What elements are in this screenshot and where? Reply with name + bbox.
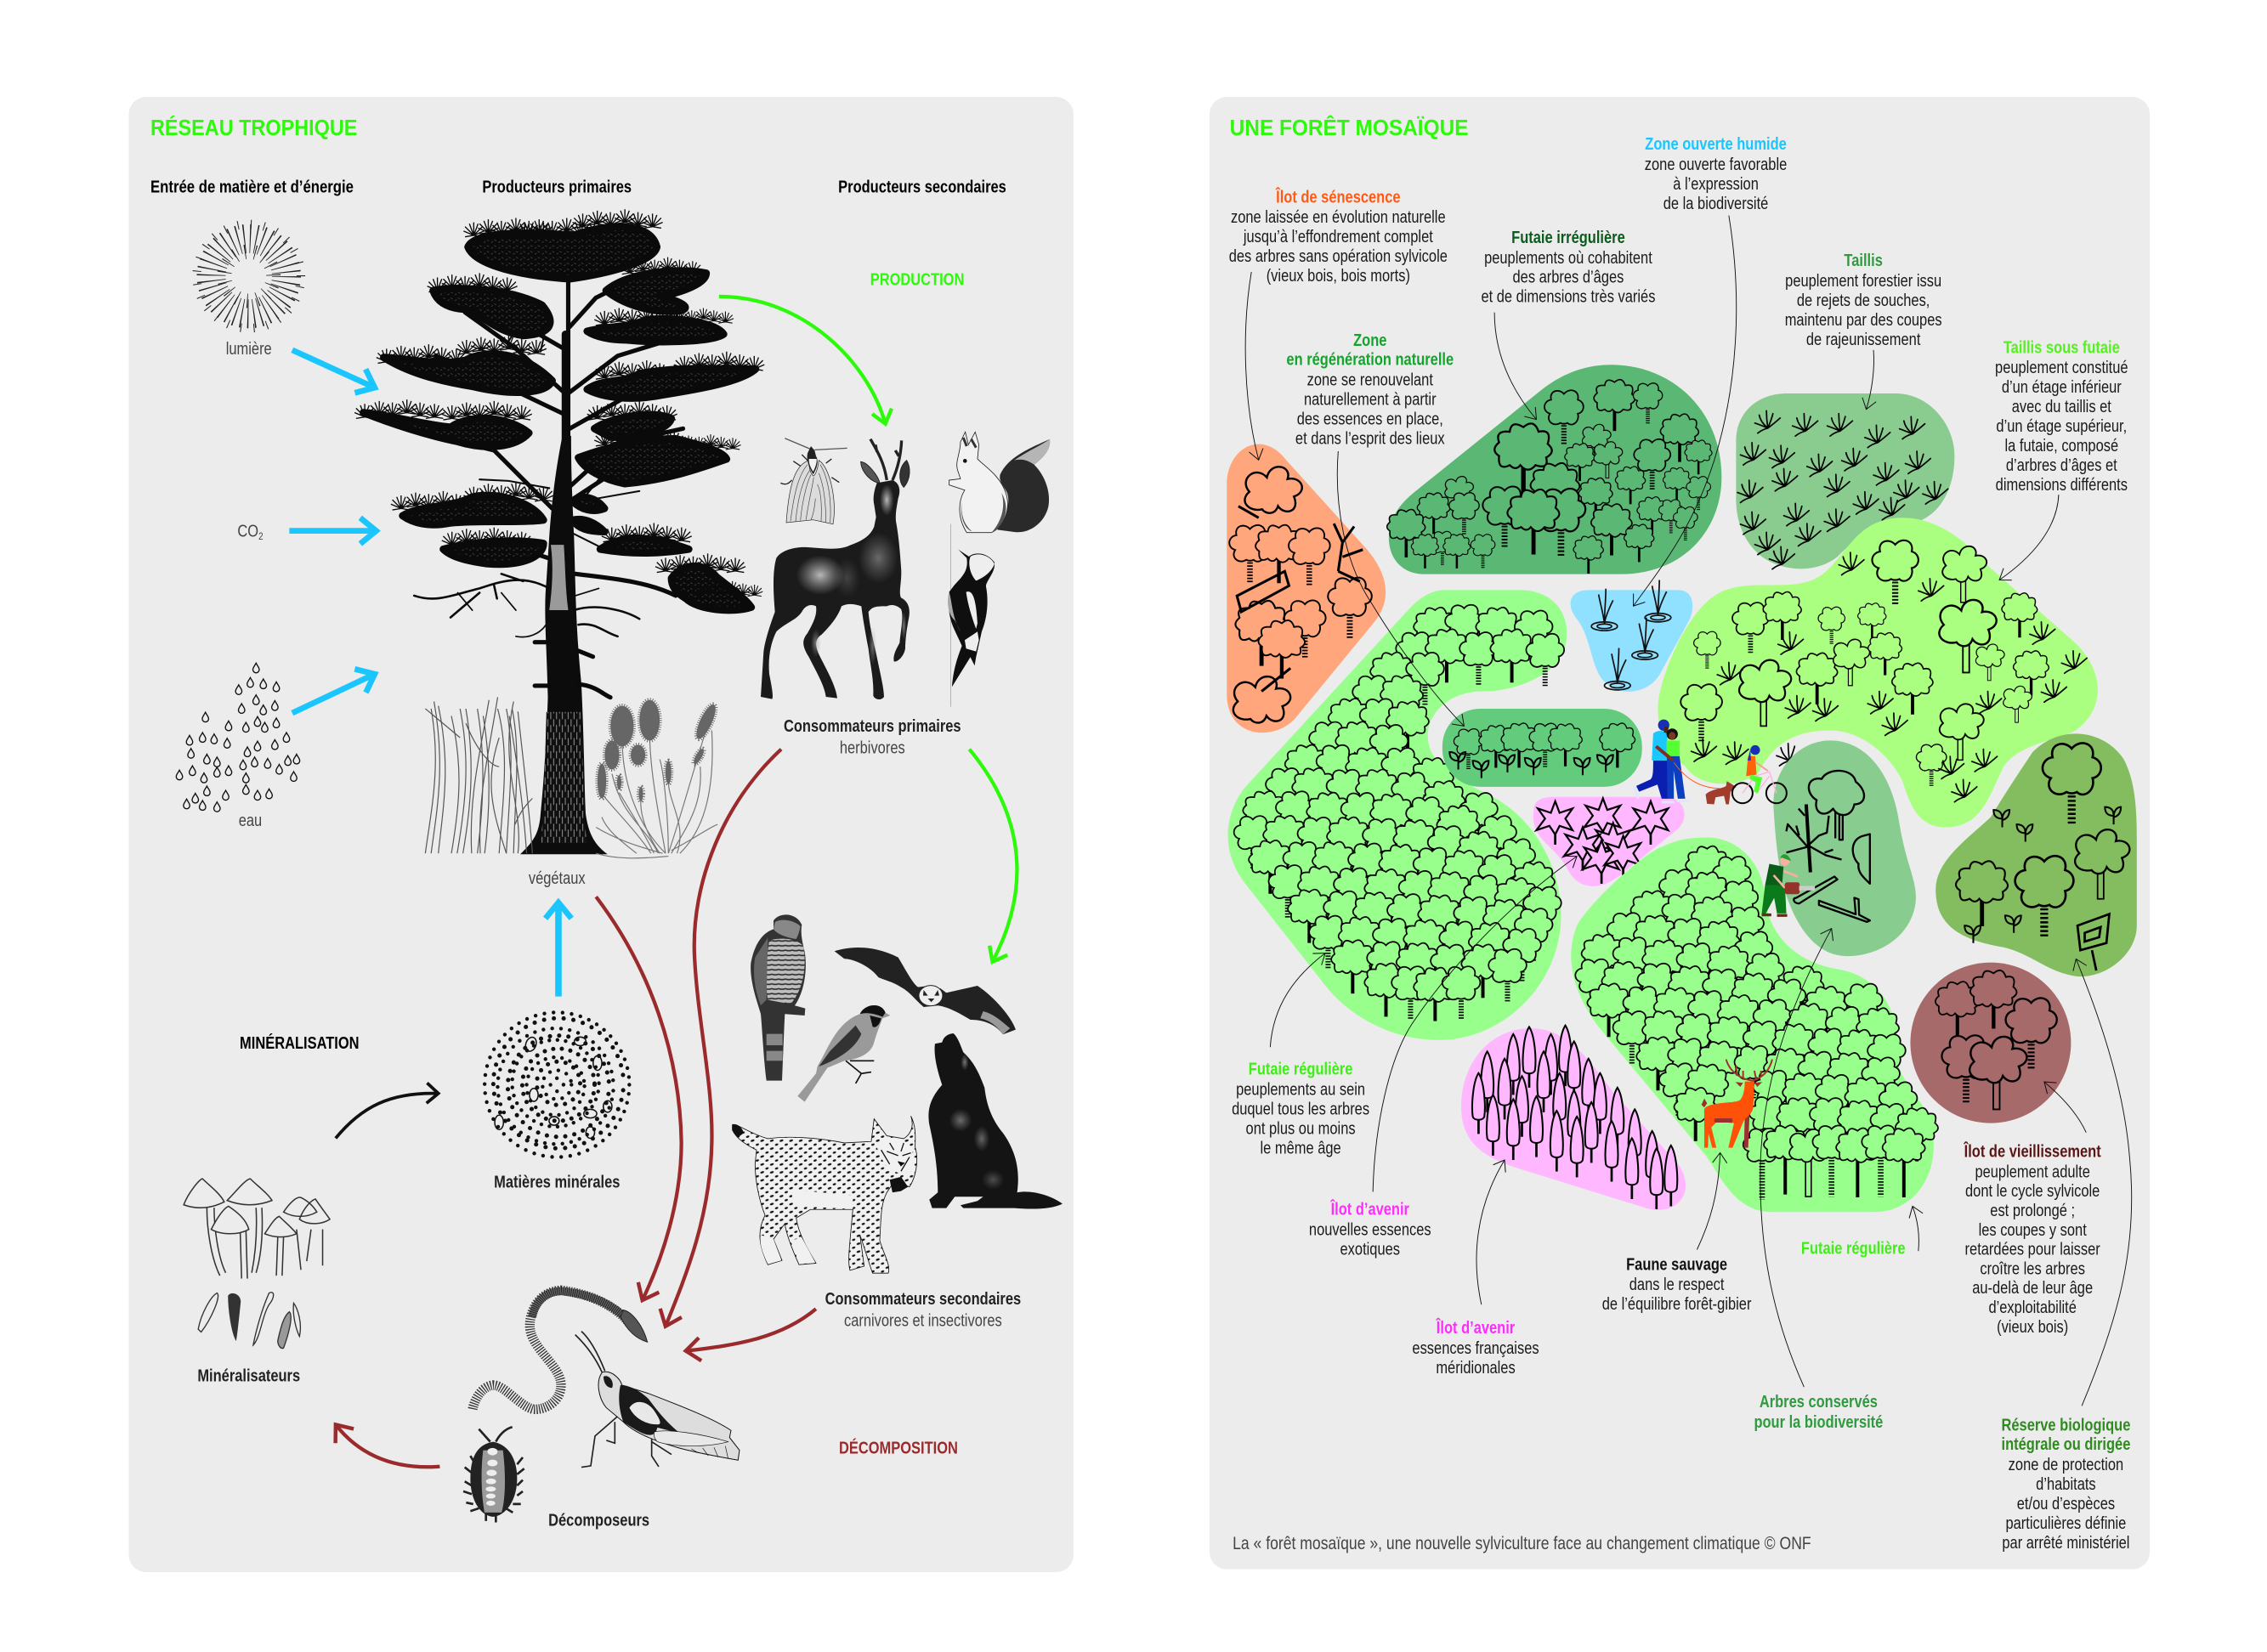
illustration: bat bbox=[835, 948, 1016, 1034]
callout: îlot de vieillissement: au-delà de leur âge bbox=[1972, 1278, 2093, 1298]
callout: zone en régénération: Zone bbox=[1353, 330, 1386, 349]
label: décomposeurs: Décomposeurs bbox=[548, 1510, 649, 1530]
illustration: moth bbox=[780, 438, 847, 524]
figure: lumberjack bbox=[1762, 854, 1815, 915]
figure: walking couple bbox=[1635, 720, 1689, 802]
callout: îlot de sénescence: (vieux bois, bois morts) bbox=[1267, 265, 1410, 285]
callout: zone en régénération: et dans l’esprit des lieux bbox=[1295, 428, 1445, 448]
callout: futaie régulière gauche: peuplements au sein bbox=[1236, 1079, 1365, 1099]
callout: zone ouverte humide: à l’expression bbox=[1673, 173, 1759, 193]
zone: îlot d'avenir français bbox=[1461, 1026, 1686, 1210]
callout: réserve biologique: zone de protection bbox=[2009, 1454, 2123, 1474]
callout: zone en régénération: naturellement à partir bbox=[1304, 389, 1437, 409]
callout: faune sauvage: Faune sauvage bbox=[1626, 1254, 1727, 1274]
callout: taillis sous futaie: dimensions différents bbox=[1996, 474, 2128, 494]
illustration: wolf bbox=[928, 1033, 1063, 1208]
arrow: CO2 to tree bbox=[289, 529, 377, 533]
arrow: plants to decomposers bbox=[596, 897, 682, 1300]
callout: îlot de vieillissement: est prolongé ; bbox=[1990, 1200, 2075, 1219]
zone: futaie régulière gauche bbox=[1228, 590, 1567, 1040]
arrow: water to tree bbox=[292, 674, 375, 713]
callout: îlot d'avenir exotiques: nouvelles essences bbox=[1309, 1219, 1431, 1239]
callout: taillis sous futaie: Taillis sous futaie bbox=[2003, 337, 2120, 357]
illustration: lynx bbox=[732, 1116, 917, 1273]
figure: dog and leash bbox=[1674, 762, 1737, 805]
callout: îlot de sénescence: zone laissée en évolution naturelle bbox=[1231, 207, 1446, 226]
callout: îlot de vieillissement: d’exploitabilité bbox=[1988, 1297, 2077, 1316]
callout: réserve biologique: Réserve biologique bbox=[2001, 1415, 2130, 1434]
figures: walkers and cyclist bbox=[1635, 720, 1815, 915]
icon: water drops bbox=[176, 663, 300, 812]
arrow: minerals to plants bbox=[557, 902, 560, 997]
label: eau: eau bbox=[239, 810, 262, 829]
heading: entrée de matière: Entrée de matière et d’énergie bbox=[150, 177, 354, 196]
callout: réserve biologique: et/ou d’espèces bbox=[2017, 1493, 2115, 1513]
illustration: woodlouse bbox=[463, 1427, 524, 1523]
arrow: carnivores to decomposers bbox=[686, 1309, 816, 1351]
callout: îlot de vieillissement: (vieux bois) bbox=[1997, 1316, 2068, 1336]
callout: futaie régulière gauche: le même âge bbox=[1260, 1138, 1341, 1157]
callout: taillis: Taillis bbox=[1844, 251, 1883, 270]
callout: futaie régulière droite: Futaie régulière bbox=[1801, 1238, 1906, 1258]
callout: arbres conservés: pour la biodiversité bbox=[1754, 1412, 1883, 1431]
callout: zone ouverte humide: zone ouverte favorable bbox=[1645, 154, 1787, 173]
panel: une forêt mosaïque bbox=[1210, 97, 2150, 1570]
illustrations: primary consumers bbox=[761, 432, 1050, 707]
arrow: light to tree bbox=[292, 350, 375, 388]
label: production: PRODUCTION bbox=[870, 269, 964, 289]
callout: futaie régulière gauche: duquel tous les arbres bbox=[1232, 1099, 1369, 1118]
callout: futaie irrégulière: des arbres d’âges bbox=[1513, 267, 1624, 286]
zone: coupe bbox=[1773, 740, 1916, 956]
callout: futaie irrégulière: peuplements où cohabitent bbox=[1484, 247, 1652, 267]
callout: îlot de vieillissement: peuplement adulte bbox=[1975, 1162, 2090, 1181]
heading: producteurs primaires: Producteurs primaires bbox=[482, 177, 632, 196]
icon: sun bbox=[196, 224, 301, 328]
illustration: grass stems bbox=[425, 697, 532, 853]
callout: taillis sous futaie: la futaie, composé bbox=[2005, 435, 2118, 455]
zone: réserve biologique bbox=[1935, 733, 2137, 976]
callout: zone en régénération: en régénération naturelle bbox=[1286, 349, 1454, 369]
callout: futaie irrégulière: Futaie irrégulière bbox=[1511, 227, 1625, 246]
callout: arbres conservés: Arbres conservés bbox=[1760, 1391, 1878, 1411]
callout: îlot de sénescence: des arbres sans opération sylvicole bbox=[1229, 246, 1448, 265]
label: décomposition: DÉCOMPOSITION bbox=[839, 1438, 958, 1457]
zone: futaie régulière droite bbox=[1571, 837, 1938, 1212]
zone: taillis sous futaie bbox=[1658, 518, 2098, 828]
label: CO2: 2 bbox=[258, 531, 264, 542]
illustration: grasshopper bbox=[575, 1332, 740, 1468]
label: minéralisateurs: Minéralisateurs bbox=[197, 1366, 300, 1385]
callout: futaie irrégulière: et de dimensions très variés bbox=[1481, 286, 1655, 306]
zone: îlot d'avenir exotique bbox=[1533, 797, 1685, 886]
zone: îlot de vieillissement bbox=[1910, 963, 2071, 1123]
callout: îlot d'avenir exotiques: exotiques bbox=[1340, 1239, 1400, 1259]
callout: taillis sous futaie: d’un étage supérieur, bbox=[1996, 416, 2127, 435]
callout: îlot de vieillissement: dont le cycle sylvicole bbox=[1965, 1181, 2100, 1201]
caption: crédit: La « forêt mosaïque », une nouvelle sylviculture face au changement climatique © ONF bbox=[1233, 1533, 1811, 1553]
callout: futaie régulière gauche: ont plus ou moins bbox=[1246, 1118, 1356, 1138]
title: une forêt mosaïque: UNE FORÊT MOSAÏQUE bbox=[1230, 115, 1469, 140]
illustrations: secondary consumers bbox=[732, 914, 1063, 1273]
arrow: decomposers to mineralizers bbox=[336, 1424, 439, 1467]
zone: taillis bbox=[1736, 393, 1954, 569]
panel: réseau trophique bbox=[128, 97, 1074, 1572]
callout: îlot d'avenir françaises: essences françaises bbox=[1412, 1338, 1539, 1357]
label: consommateurs secondaires: carnivores et insectivores bbox=[844, 1310, 1002, 1330]
callout: zone ouverte humide: de la biodiversité bbox=[1663, 193, 1768, 212]
label: CO2: CO bbox=[237, 521, 258, 540]
callout: réserve biologique: particulières définie bbox=[2005, 1513, 2126, 1532]
heading: producteurs secondaires: Producteurs secondaires bbox=[838, 177, 1006, 196]
callout: taillis: de rajeunissement bbox=[1806, 329, 1920, 348]
illustration: bacteria bbox=[198, 1293, 300, 1349]
callout: zone en régénération: zone se renouvelant bbox=[1307, 370, 1433, 389]
label: végétaux: végétaux bbox=[529, 868, 586, 887]
callout: îlot de vieillissement: croître les arbres bbox=[1980, 1259, 2085, 1278]
callout: taillis: de rejets de souches, bbox=[1797, 290, 1930, 309]
illustration: roe deer bbox=[761, 439, 910, 699]
callout: îlot d'avenir exotiques: Îlot d’avenir bbox=[1330, 1199, 1409, 1219]
callout: réserve biologique: par arrêté ministériel bbox=[2002, 1532, 2129, 1552]
illustration: hawk bbox=[751, 914, 806, 1081]
callout: futaie régulière gauche: Futaie régulière bbox=[1249, 1059, 1352, 1078]
title: réseau trophique: RÉSEAU TROPHIQUE bbox=[150, 116, 357, 140]
callout: îlot de sénescence: Îlot de sénescence bbox=[1275, 187, 1401, 206]
arrow: herbivores to carnivores bbox=[969, 750, 1017, 962]
arrow: mineralisation bbox=[336, 1094, 439, 1138]
label: lumière: lumière bbox=[226, 338, 272, 358]
arrow: herbivores to decomposers bbox=[666, 750, 781, 1327]
zone: régénération naturelle bbox=[1442, 709, 1642, 787]
callout: taillis: peuplement forestier issu bbox=[1785, 270, 1941, 290]
callout: taillis sous futaie: peuplement constitué bbox=[1995, 358, 2128, 376]
callout: faune sauvage: de l’équilibre forêt-gibier bbox=[1602, 1294, 1751, 1314]
callout: îlot de sénescence: jusqu’à l’effondrement complet bbox=[1243, 226, 1433, 246]
label: matières minérales: Matières minérales bbox=[494, 1172, 620, 1191]
zone: ouverte humide bbox=[1571, 580, 1692, 692]
callout: taillis sous futaie: d’arbres d’âges et bbox=[2006, 455, 2117, 474]
zone: îlot de sénescence bbox=[1227, 444, 1386, 733]
callout: îlot d'avenir françaises: méridionales bbox=[1436, 1357, 1516, 1377]
arrow: production to herbivores bbox=[719, 297, 886, 424]
callout: îlot de vieillissement: les coupes y sont bbox=[1979, 1219, 2087, 1239]
callout: faune sauvage: dans le respect bbox=[1629, 1275, 1724, 1294]
label: consommateurs primaires: Consommateurs primaires bbox=[784, 716, 961, 736]
callout: îlot de vieillissement: retardées pour laisser bbox=[1965, 1239, 2100, 1259]
leader lines bbox=[1245, 216, 2132, 1406]
illustration: pine tree bbox=[354, 209, 764, 854]
illustration: worm bbox=[473, 1290, 648, 1409]
callout: taillis sous futaie: d’un étage inférieur bbox=[2002, 376, 2122, 396]
label: consommateurs primaires: herbivores bbox=[840, 738, 905, 757]
zone: futaie irrégulière bbox=[1387, 365, 1721, 574]
figure: cyclist bbox=[1732, 745, 1787, 803]
callout: taillis sous futaie: avec du taillis et bbox=[2012, 396, 2111, 416]
callout: réserve biologique: d’habitats bbox=[2036, 1474, 2096, 1493]
illustration: small bird bbox=[797, 1005, 890, 1102]
callout: réserve biologique: intégrale ou dirigée bbox=[2001, 1434, 2130, 1454]
callout: îlot d'avenir françaises: Îlot d’avenir bbox=[1436, 1318, 1515, 1338]
illustration: woodpecker bbox=[948, 524, 995, 707]
figure: stag bbox=[1702, 1060, 1772, 1148]
callout: îlot de vieillissement: Îlot de vieillissement bbox=[1964, 1141, 2101, 1161]
callout: taillis: maintenu par des coupes bbox=[1785, 309, 1942, 329]
illustration: squirrel bbox=[949, 432, 1050, 533]
illustrations: decomposers bbox=[463, 1290, 740, 1523]
illustration: mushrooms bbox=[184, 1179, 330, 1279]
callout: zone en régénération: des essences en place, bbox=[1297, 409, 1443, 428]
icon: mineral matter bbox=[485, 1012, 629, 1157]
label: minéralisation: MINÉRALISATION bbox=[240, 1032, 360, 1052]
label: consommateurs secondaires: Consommateurs secondaires bbox=[825, 1289, 1021, 1309]
illustration: grass plumes bbox=[596, 700, 719, 858]
callout: zone ouverte humide: Zone ouverte humide bbox=[1645, 134, 1787, 154]
